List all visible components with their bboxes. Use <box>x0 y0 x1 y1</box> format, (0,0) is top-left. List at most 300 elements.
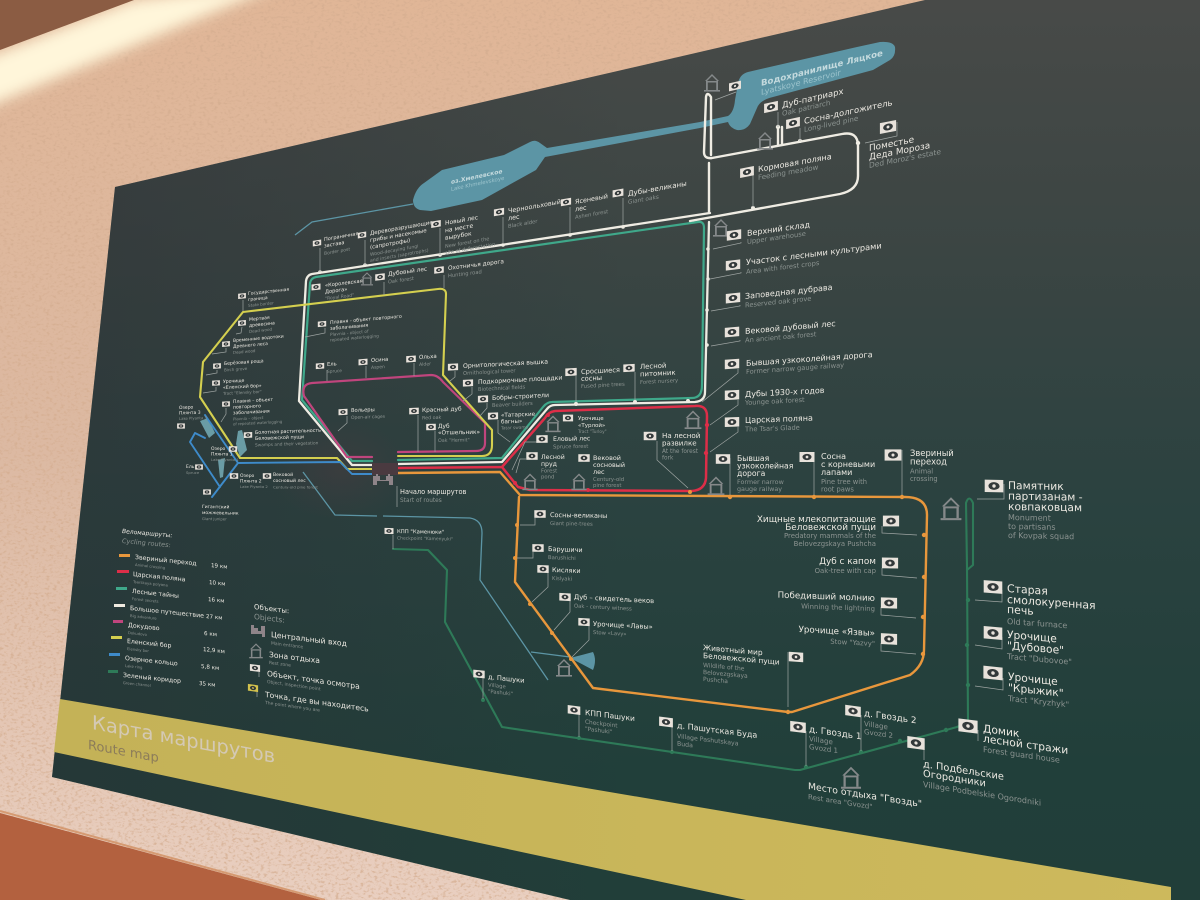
label: Yazvy stow <box>799 625 916 654</box>
label: lake Plyanta two: Lake Plyanta 2 <box>240 484 268 489</box>
label: oak with cap <box>815 557 917 578</box>
legend: cycling routes: Озерное кольцо <box>125 655 178 668</box>
label: royal road: «Королевская <box>325 278 363 289</box>
label: plavnia one: повторного <box>233 404 261 411</box>
label: spruce forest <box>512 434 591 470</box>
label: dead wood: Dead wood <box>249 327 272 334</box>
legend: objects: Main entrance <box>271 641 303 650</box>
label: aspen: Осина <box>371 357 388 364</box>
legend: cycling routes: Еленский бор <box>127 637 171 650</box>
label: swamp vegetation: Беловежской пущи <box>255 433 304 442</box>
label: former narrow gauge south: Former narrow <box>737 478 784 486</box>
label: reservoir: Lyatskoye Reservoir <box>761 67 841 97</box>
label: century-old pine forest: Century-old <box>593 477 624 483</box>
label: border post: Border post <box>324 246 350 257</box>
label: at the forest fork: На лесной <box>662 431 700 440</box>
label: pine with root paws: с корневыми <box>821 460 875 469</box>
label: Podbelskie Ogorodniki <box>907 736 1041 808</box>
label: long-lived pine: Long-lived pine <box>804 113 859 134</box>
label: birch grove: Birch grove <box>224 366 248 372</box>
start gate icon <box>372 463 398 485</box>
label: lake Plyanta one: Lake Plyanta 1 <box>211 457 239 462</box>
label: oak patriarch <box>764 87 843 127</box>
legend: cycling routes: Tsarskaya polyana <box>132 579 168 588</box>
legend: cycling routes: 27 км <box>206 614 223 622</box>
label: oak patriarch: Oak patriarch <box>782 98 830 118</box>
label: Elensky bor tract: Урочище <box>223 378 245 385</box>
label: giant pine trees: Giant pine-trees <box>550 521 593 528</box>
label: old tar furnace: Old tar furnace <box>1007 617 1067 630</box>
label: new forest <box>431 210 495 256</box>
label: checkpoint Pashuki: КПП Пашуки <box>585 708 635 723</box>
label: alder <box>406 354 437 376</box>
label: tatar swamps <box>488 412 536 442</box>
label: new forest: Новый лес <box>445 213 478 227</box>
label: ornithological tower <box>448 359 548 381</box>
label: fused pines: сосны <box>581 374 602 383</box>
label: black alder: лес <box>508 212 520 222</box>
label: oak forest: Дубовый лес <box>388 266 427 278</box>
label: fused pines: Сросшиеся <box>581 366 620 376</box>
label: tsar's glade: Царская поляна <box>745 414 813 425</box>
label: Turloy tract: Урочище <box>578 416 604 422</box>
route: tsar glade red <box>398 406 707 491</box>
label: forest pond: pond <box>541 474 554 480</box>
label: wildlife of Belovezhskaya: Беловежской пущи <box>703 651 780 667</box>
label: predatory mammals <box>757 515 917 548</box>
label: century-old pine forest west <box>263 471 318 490</box>
legend: objects: The point where you are <box>264 700 320 714</box>
label: oak with cap: Oak-tree with cap <box>815 567 876 575</box>
label: former narrow gauge road: Бывшая узкоколейная дорога <box>746 350 873 368</box>
label: Barushichi <box>517 544 583 562</box>
label: ashen forest: лес <box>575 203 587 213</box>
label: beaver builders: Beaver builders <box>492 401 533 409</box>
label: village Gvozd one <box>790 721 862 766</box>
label: Yazvy stow: Урочище «Язвы» <box>799 625 875 639</box>
label: feeding meadow: Feeding meadow <box>758 162 819 182</box>
legend: objects: Зона отдыха <box>269 650 320 665</box>
label: wildlife of Belovezhskaya <box>703 643 803 707</box>
label: at the forest fork: At the forest <box>662 449 699 455</box>
label: wildlife of Belovezhskaya: Belovezgskaya <box>703 669 748 680</box>
label: Ded Moroz estate: Поместье <box>869 135 915 154</box>
label: monument to partisans <box>977 479 1083 541</box>
label: village Gvozd two: д. Гвоздь 2 <box>864 709 917 726</box>
label: wildlife of Belovezhskaya: Животный мир <box>703 643 763 657</box>
label: Lavy stow: Stow «Lavy» <box>593 630 627 638</box>
legend: cycling routes: Зеленый коридор <box>123 671 181 685</box>
label: forest nursery: Forest nursery <box>640 378 678 386</box>
label: state border: граница <box>248 296 268 303</box>
label: monument to partisans: of Kovpak squad <box>1008 531 1074 541</box>
label: old tar furnace: печь <box>1007 603 1034 618</box>
label: black alder <box>494 198 561 243</box>
label: red oak <box>409 406 462 452</box>
label: Ded Moroz estate: Деда Мороза <box>869 141 930 163</box>
rest area icons <box>361 74 961 789</box>
label: tsar's glade: The Tsar's Glade <box>744 424 800 434</box>
Plyanta lakes <box>200 418 215 438</box>
label: old tar furnace: Старая <box>1007 582 1048 598</box>
label: wood-decaying fungi <box>358 220 433 265</box>
label: plavnia one: Plavnia – object <box>233 415 264 421</box>
label: century-old pine forest west: Вековой <box>273 471 293 478</box>
label: oak hermit: Oak "Hermit" <box>438 437 470 444</box>
label: century-old pine forest <box>578 454 625 489</box>
label: village Gvozd one: Village <box>809 734 833 746</box>
label: oaks of the 1930s: Дубы 1930-х годов <box>745 386 825 399</box>
legend: objects: Точка, где вы находитесь <box>264 690 369 714</box>
label: new forest: на месте <box>445 223 473 234</box>
label: ashen forest: Ashen forest <box>575 209 608 221</box>
small pond <box>570 652 595 670</box>
label: giant pine trees: Сосны-великаны <box>550 511 607 520</box>
label: forest nursery <box>623 361 678 400</box>
label: century-old pine forest: сосновый <box>593 461 625 469</box>
label: plavnia two: заболачивания <box>330 323 368 332</box>
label: wildlife of Belovezhskaya: Pushcha <box>703 676 728 685</box>
label: Barushichi: Барушичи <box>548 545 583 554</box>
label: rest area Gvozd: Rest area "Gvozd" <box>808 792 872 811</box>
label: animal crossing: переход <box>910 456 947 466</box>
label: temporary streams: Временные водотоки <box>233 334 284 344</box>
label: start of routes: Start of routes <box>400 498 442 504</box>
label: oak hermit: Дуб <box>438 424 450 430</box>
label: former narrow gauge south: gauge railway <box>737 485 782 493</box>
legend: objects: Rest zone <box>269 660 291 669</box>
label: Elensky bor tract: Tract "Elensky bor" <box>222 389 262 396</box>
label: state border: State border <box>248 300 274 308</box>
label: former narrow gauge south <box>716 454 793 495</box>
legend: cycling routes: Green channel <box>123 680 151 688</box>
legend: cycling routes: 6 км <box>204 631 217 638</box>
yellow title band <box>54 699 1171 900</box>
label: reservoir viewpoint <box>715 81 741 100</box>
label: tatar swamps: «Татарские <box>501 412 536 419</box>
legend: cycling routes: Dokudovo <box>128 630 148 637</box>
label: giant juniper: Giant juniper <box>202 516 227 521</box>
legend: cycling routes: Cycling routes: <box>122 537 171 549</box>
legend: cycling routes: Лесные тайны <box>132 587 179 600</box>
label: Turloy tract: Tract "Turloy" <box>577 429 607 435</box>
label: pine with root paws <box>800 452 875 495</box>
label: tatar swamps: багны» <box>501 419 522 425</box>
label: giant juniper: можжевельник <box>202 511 239 517</box>
station dots <box>318 125 860 406</box>
label: lake Plyanta three: Плянта 3 <box>179 410 201 416</box>
label: temporary streams <box>212 334 284 355</box>
legend: cycling routes: Большое путешествие <box>130 605 204 620</box>
label: Barushichi: Barushichi <box>548 555 576 562</box>
label: predatory mammals: Хищные млекопитающие <box>757 515 876 525</box>
label: village Gvozd two <box>845 705 917 751</box>
label: lake Plyanta two <box>230 473 268 489</box>
label: Lavy stow <box>572 618 653 657</box>
label: beaver builders: Бобры-строители <box>492 391 549 402</box>
legend: cycling routes: Звериный переход <box>135 553 197 567</box>
label: lake Khmelevskoye <box>451 168 505 193</box>
orange and red station dots <box>481 413 970 769</box>
legend: cycling routes: Lake ring <box>125 663 143 670</box>
label: village Pashuki <box>473 670 524 699</box>
label: beaver builders <box>478 391 549 417</box>
label: forest nursery: Лесной <box>640 362 666 371</box>
label: border post <box>313 231 358 272</box>
label: checkpoint Pashuki <box>568 705 635 739</box>
label: spruce forest: Еловый лес <box>553 434 591 443</box>
label: open-air cages <box>338 407 386 431</box>
route: elensky bor yellow <box>200 289 492 469</box>
label: lake Plyanta two: Плянта 2 <box>240 478 262 484</box>
legend: cycling routes: Animal crossing <box>135 562 166 570</box>
label: Kislyaki: Кисляки <box>552 566 581 575</box>
label: village Pashuki: д. Пашуки <box>488 673 524 685</box>
label: forest pond: Лесной <box>541 453 565 461</box>
route: dokudovo pink <box>303 375 485 457</box>
label: village Pashuki: Village <box>488 683 506 690</box>
label: biotechnical fields: Biotechnical fields <box>478 385 526 393</box>
label: century-old pine forest: pine forest <box>593 483 621 489</box>
route: animal crossing orange <box>398 472 927 712</box>
label: forest pond: пруд <box>541 461 557 468</box>
legend: cycling routes: Big adventure <box>130 613 157 621</box>
label: Pashutskaya Buda: Buda <box>677 741 693 749</box>
stream <box>295 204 413 235</box>
label: feeding meadow: Кормовая поляна <box>758 152 832 174</box>
label: monument to partisans: Памятник <box>1008 479 1064 493</box>
label: state border <box>238 287 289 311</box>
label: lake Khmelevskoye: оз.Хмелевское <box>451 168 502 186</box>
label: former narrow gauge south: дорога <box>737 469 766 478</box>
label: biotechnical fields: Подкормочные площадки <box>478 375 562 386</box>
label: wildlife of Belovezhskaya: Wildlife of the <box>703 662 745 673</box>
label: village Gvozd two: Village <box>864 719 888 731</box>
label: former narrow gauge road <box>702 350 873 402</box>
label: former narrow gauge south: Бывшая <box>737 454 769 463</box>
label: wood-decaying fungi: Wood-decaying fungi <box>370 243 418 258</box>
label: monument to partisans: Monument <box>1008 513 1051 523</box>
label: biotechnical fields <box>463 375 562 401</box>
label: Pashutskaya Buda: д. Пашутская Буда <box>677 721 757 740</box>
label: winning the lightning: Winning the lightning <box>801 602 875 613</box>
label: Dubovoe tract: Tract "Dubovoe" <box>1006 652 1072 667</box>
legend: objects: Object, inspection point <box>267 679 321 693</box>
label: alder: Ольха <box>419 354 437 361</box>
label: black alder: Черноольховый <box>508 198 561 215</box>
label: oak patriarch: Дуб-патриарх <box>782 87 843 111</box>
label: animal crossing: crossing <box>910 475 938 483</box>
label: swamp vegetation: Болотная растительность <box>255 428 321 436</box>
legend: cycling routes: 10 км <box>209 580 226 588</box>
label: swamp vegetation <box>244 428 321 448</box>
label: oaks of the 1930s: Younge oak forest <box>744 396 805 407</box>
label: giant juniper <box>202 489 239 522</box>
label: open-air cages: Open-air cages <box>351 414 386 421</box>
label: temporary streams: Древнего леса <box>233 341 268 350</box>
label: lake Plyanta one <box>211 446 239 462</box>
label: Dubovoe tract: "Дубовое" <box>1007 639 1064 657</box>
label: wood-decaying fungi: Дереворазрушающие <box>370 220 433 237</box>
route: green corridor <box>393 498 973 770</box>
legend: cycling routes: Царская поляна <box>133 571 186 584</box>
route: big journey white <box>299 213 710 465</box>
label: ancient oak forest <box>711 319 836 346</box>
label: dead wood <box>236 314 275 334</box>
label: spruce lake ring: Spruce <box>186 470 200 475</box>
label: temporary streams: Dead wood <box>233 348 256 355</box>
label: lake Plyanta one: Плянта 1 <box>211 452 233 458</box>
label: black alder: Black alder <box>508 219 538 230</box>
label: long-lived pine: Сосна-долгожитель <box>804 98 892 127</box>
label: swamp vegetation: Swamps and their vegetation <box>255 440 319 448</box>
legend: cycling routes: Forest secrets <box>132 596 158 604</box>
label: forest guard house: Домик <box>983 722 1020 740</box>
label: aspen <box>358 357 388 378</box>
label: lake Plyanta three: Lake Plyanta 3 <box>179 415 207 421</box>
label: Dubovoe tract: Урочище <box>1007 628 1057 645</box>
label: lake Plyanta one: Озеро <box>211 446 226 452</box>
label: border post: Пограничная <box>324 231 358 243</box>
label: giant oaks: Giant oaks <box>628 195 659 206</box>
label: century-old pine forest: лес <box>593 468 605 476</box>
label: new forest: вырубок <box>445 229 472 242</box>
label: red oak: Red oak <box>422 415 442 421</box>
label: royal road <box>312 278 363 302</box>
label: pine with root paws: Сосна <box>821 452 846 461</box>
label: predatory mammals: Predatory mammals of the <box>784 532 876 540</box>
label: spruce lake ring: Ель <box>186 464 195 470</box>
label: spruce <box>316 361 342 381</box>
label: aspen: Aspen <box>371 364 385 371</box>
label: Yazvy stow: Stow "Yazvy" <box>830 638 875 648</box>
legend: objects: Объекты: <box>254 602 289 615</box>
label: former narrow gauge south: узкоколейная <box>737 462 793 470</box>
label: monument to partisans: партизанам - <box>1008 490 1083 504</box>
label: lake Plyanta three: Озеро <box>179 404 194 411</box>
label: ashen forest: Ясеневый <box>575 192 608 206</box>
label: new forest: New forest on the <box>445 236 489 250</box>
label: animal crossing: Animal <box>910 468 933 476</box>
label: ashen forest <box>561 192 608 233</box>
label: pine with root paws: Pine tree with <box>821 478 867 486</box>
label: village Gvozd one: д. Гвоздь 1 <box>809 725 862 742</box>
label: plavnia one: заболачивания <box>233 408 270 416</box>
label: oaks of the 1930s <box>710 386 825 425</box>
label: Pashutskaya Buda <box>659 717 757 757</box>
label: rest area Gvozd: Место отдыха "Гвоздь" <box>808 781 922 810</box>
label: tsar's glade <box>710 414 813 452</box>
label: forest guard house <box>958 718 1068 766</box>
label: lake Plyanta two: Озеро <box>240 473 255 479</box>
route: forest secrets green <box>302 222 704 461</box>
label: Elensky bor tract <box>203 377 262 396</box>
legend: cycling routes <box>108 528 228 695</box>
legend: cycling routes: 5,8 км <box>201 664 219 672</box>
water bodies <box>200 42 895 680</box>
label: upper warehouse <box>713 220 810 249</box>
label: ancient oak forest: An ancient oak forest <box>745 330 817 344</box>
label: oak forest <box>375 266 427 295</box>
label: spruce lake ring <box>186 464 203 475</box>
legend: objects: Объект, точка осмотра <box>267 669 360 691</box>
title: Карта маршрутов <box>92 711 275 768</box>
label: Kislyaki <box>532 565 581 602</box>
label: giant juniper: Гигантский <box>202 503 229 510</box>
label: giant pine trees <box>520 510 607 528</box>
label: forest guard house: лесной стражи <box>983 732 1068 757</box>
label: upper warehouse: Upper warehouse <box>747 230 806 246</box>
label: forest guard house: Forest guard house <box>983 745 1060 765</box>
label: predatory mammals: Беловежской пущи <box>785 523 876 533</box>
label: wood-decaying fungi: (сапротрофы) <box>370 238 410 251</box>
label: Turloy tract <box>563 415 607 435</box>
legend: cycling routes: 12,9 км <box>203 647 225 655</box>
label: Kryzhyk tract: Урочище <box>1008 670 1058 688</box>
legend: objects <box>248 602 369 721</box>
label: checkpoint Kamenyuki: КПП "Каменюки" <box>397 529 444 536</box>
label: winning the lightning <box>778 591 916 618</box>
label: village Pashuki: "Pashuki" <box>488 689 513 698</box>
label: royal road: "Royal Road" <box>325 292 354 302</box>
river <box>303 472 570 680</box>
label: plavnia one: of repeated waterlogging <box>233 419 283 426</box>
label: plavnia one: Плавня – объект <box>233 397 273 405</box>
label: start of routes: Начало маршрутов <box>400 488 466 496</box>
label: forest pond: Forest <box>541 468 557 474</box>
label: checkpoint Kamenyuki <box>384 528 453 549</box>
label: Pashutskaya Buda: Village Pashutskaya <box>677 733 739 748</box>
label: plavnia one <box>221 396 283 426</box>
label: reservoir: Водохранилище Ляцкое <box>761 49 883 89</box>
label: Podbelskie Ogorodniki: Village Podbelskie Ogorodniki <box>923 780 1041 808</box>
label: predatory mammals: Belovezgskaya Pushcha <box>794 540 876 548</box>
label: Kryzhyk tract: Tract "Kryzhyk" <box>1007 694 1069 709</box>
label: checkpoint Pashuki: Checkpoint <box>585 720 618 730</box>
label: wood-decaying fungi: and insects (saprotrophs) <box>370 248 429 264</box>
legend: cycling routes: Веломаршруты: <box>122 528 172 539</box>
label: oak forest: Oak forest <box>388 276 414 285</box>
label: tatar swamps: Tatar swamp <box>500 425 529 432</box>
label: village Gvozd one: Gvozd 1 <box>809 742 838 755</box>
label: lake Khmelevskoye: Lake Khmelevskoye <box>451 176 505 193</box>
label: forest crops <box>710 240 882 279</box>
label: spruce forest: Spruce forest <box>553 444 588 450</box>
legend: objects: Objects: <box>254 612 285 625</box>
label: century-old pine forest west: Century-old pine forest <box>273 484 318 490</box>
label: fused pines: Fused pine trees <box>581 382 625 390</box>
label: reserved oak grove <box>711 283 833 311</box>
label: giant oaks <box>613 179 687 225</box>
label: century-old pine forest west: сосновый лес <box>273 477 306 484</box>
label: oak century witness <box>554 593 654 630</box>
label: reserved oak grove: Заповедная дубрава <box>745 283 833 301</box>
lake Khmelevskoye with channel <box>413 42 895 211</box>
label: monument to partisans: ковпаковцам <box>1008 500 1082 514</box>
label: start of routes <box>397 486 466 507</box>
label: plavnia two <box>305 314 402 343</box>
label: old tar furnace <box>975 580 1096 632</box>
label: hunting road: Hunting road <box>448 269 482 279</box>
label: Podbelskie Ogorodniki: д. Подбельские <box>923 759 1004 783</box>
label: checkpoint Pashuki: "Pashuki" <box>585 727 613 736</box>
label: oak with cap: Дуб с капом <box>819 557 876 567</box>
label: new forest: site of deforestation <box>445 242 495 256</box>
label: ornithological tower: Ornithological tower <box>463 368 516 377</box>
label: century-old pine forest: Вековой <box>593 454 621 462</box>
label: dead wood: Мертвая <box>249 315 270 323</box>
label: reserved oak grove: Reserved oak grove <box>745 295 811 309</box>
